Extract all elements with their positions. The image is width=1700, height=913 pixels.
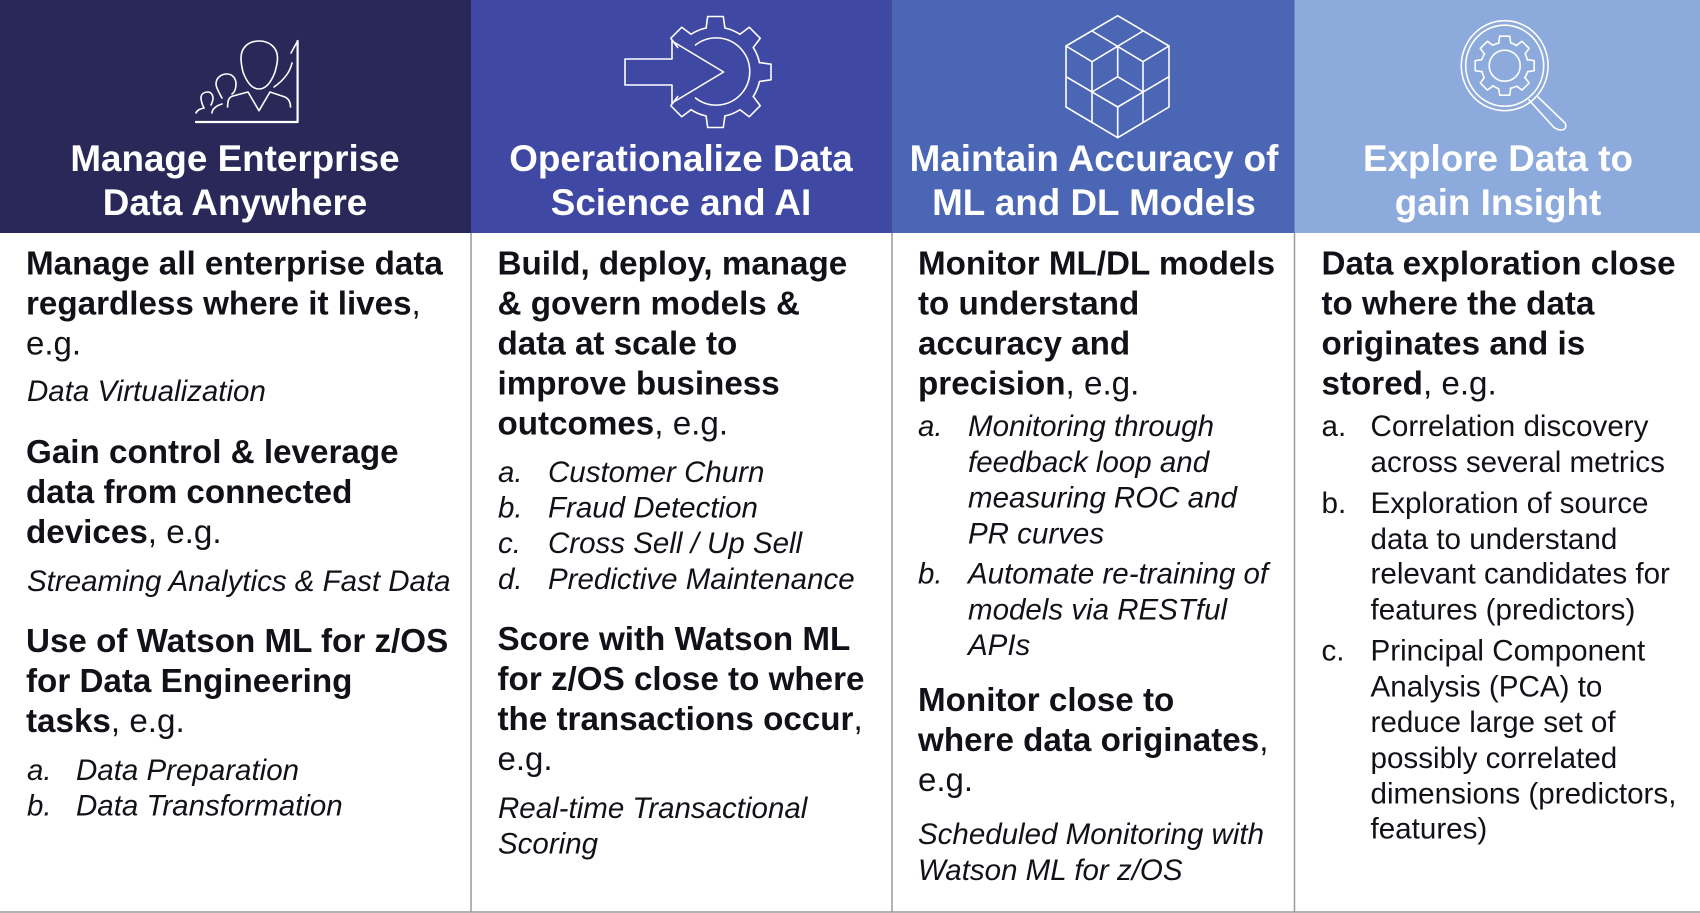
header band 2 xyxy=(471,0,892,233)
text block: manage enterprise body: b. xyxy=(27,790,52,822)
text block: maintain accuracy body: Automate re-training of xyxy=(966,558,1271,590)
text block: maintain accuracy body: precision, e.g. xyxy=(918,366,1139,402)
text block: operationalize body: Real-time Transactional xyxy=(498,792,809,825)
text block: explore body: Data exploration close xyxy=(1322,246,1676,282)
header band 4 xyxy=(1294,0,1700,233)
text block: maintain accuracy body: Scheduled Monitoring with xyxy=(918,818,1264,851)
text block: maintain accuracy body: e.g. xyxy=(918,761,973,798)
text block: maintain accuracy body xyxy=(917,246,1275,887)
text block: maintain accuracy body: b. xyxy=(918,558,943,590)
heading 2: Science and AI xyxy=(551,182,811,223)
text block: explore body: to where the data xyxy=(1322,286,1595,322)
text block: manage enterprise body: a. xyxy=(27,754,52,787)
heading 4: gain Insight xyxy=(1395,182,1601,223)
text block: manage enterprise body: Use of Watson ML for z/OS xyxy=(26,623,448,660)
text block: maintain accuracy body: models via RESTful xyxy=(968,594,1228,626)
text block: manage enterprise body: Data Transformation xyxy=(76,790,343,822)
text block: manage enterprise body: devices, e.g. xyxy=(26,514,222,551)
text block: operationalize body: Fraud Detection xyxy=(548,492,758,524)
heading 2: Operationalize Data xyxy=(509,138,853,179)
text block: operationalize body: Build, deploy, manage xyxy=(498,246,847,282)
text block: operationalize body: a. xyxy=(498,456,523,489)
text block: explore body: a. xyxy=(1322,410,1346,443)
text block: manage enterprise body: e.g. xyxy=(26,324,81,362)
header band 3 xyxy=(892,0,1294,233)
text block: explore body: reduce large set of xyxy=(1370,706,1616,739)
text block: manage enterprise body: for Data Engineering xyxy=(26,663,352,700)
text block: operationalize body: b. xyxy=(498,492,523,524)
text block: operationalize body: the transactions occur, xyxy=(498,701,863,738)
text block: manage enterprise body: Data Virtualization xyxy=(27,375,266,408)
text block: maintain accuracy body: Monitoring through xyxy=(968,410,1214,443)
text block: explore body: Exploration of source xyxy=(1370,487,1649,520)
text block: operationalize body: Scoring xyxy=(498,828,599,860)
text block: operationalize body xyxy=(498,246,864,860)
text block: manage enterprise body: Manage all enterprise data xyxy=(26,246,443,282)
text block: manage enterprise body: Data Preparation xyxy=(76,754,299,787)
text block: operationalize body: Predictive Maintenance xyxy=(548,563,855,596)
panel: operationalize data science xyxy=(471,0,892,860)
text block: maintain accuracy body: feedback loop and xyxy=(968,446,1211,479)
text block: explore body: c. xyxy=(1322,634,1345,668)
text block: maintain accuracy body: Watson ML for z/OS xyxy=(918,854,1183,887)
text block: operationalize body: Score with Watson ML xyxy=(498,621,850,658)
heading 4: Explore Data to xyxy=(1363,138,1633,179)
icon: magnifier with gear xyxy=(1461,21,1566,130)
text block: operationalize body: Customer Churn xyxy=(548,456,764,489)
text block: operationalize body: data at scale to xyxy=(498,326,737,362)
text block: explore body: across several metrics xyxy=(1370,446,1665,479)
text block: explore body: possibly correlated xyxy=(1370,742,1617,775)
text block: explore body: features (predictors) xyxy=(1370,594,1635,626)
text block: maintain accuracy body: to understand xyxy=(918,286,1139,322)
icon: arrow into gear xyxy=(625,15,772,129)
text block: manage enterprise body: tasks, e.g. xyxy=(26,703,185,740)
text block: operationalize body: Cross Sell / Up Sell xyxy=(548,527,804,560)
text block: explore body: dimensions (predictors, xyxy=(1370,778,1676,810)
text block: maintain accuracy body: Monitor ML/DL models xyxy=(918,246,1275,282)
header band 1 xyxy=(0,0,471,233)
text block: explore body: Correlation discovery xyxy=(1370,410,1649,443)
text block: maintain accuracy body: where data originates, xyxy=(917,722,1268,759)
heading 1: Manage Enterprise xyxy=(70,138,400,179)
text block: explore body: Principal Component xyxy=(1370,634,1645,668)
text block: explore body: relevant candidates for xyxy=(1370,558,1670,590)
text block: explore body xyxy=(1322,246,1676,846)
panel: explore data xyxy=(1294,0,1700,846)
text block: explore body: Analysis (PCA) to xyxy=(1370,670,1602,704)
panel: manage enterprise data xyxy=(0,0,471,822)
text block: maintain accuracy body: APIs xyxy=(966,629,1031,662)
text block: operationalize body: for z/OS close to where xyxy=(498,661,864,698)
text block: maintain accuracy body: accuracy and xyxy=(918,326,1130,362)
text block: operationalize body: d. xyxy=(498,563,523,596)
text block: operationalize body: improve business xyxy=(498,366,780,402)
icon: people with growth chart xyxy=(196,41,298,122)
text block: operationalize body: c. xyxy=(498,527,521,560)
text block: maintain accuracy body: PR curves xyxy=(968,518,1104,550)
text block: manage enterprise body: Streaming Analytics & Fast Data xyxy=(27,565,451,598)
text block: manage enterprise body: Gain control & leverage xyxy=(26,434,399,471)
text block: explore body: originates and is xyxy=(1322,326,1585,362)
panel: maintain accuracy xyxy=(892,0,1294,887)
heading 3: ML and DL Models xyxy=(932,182,1256,223)
text block: maintain accuracy body: a. xyxy=(918,410,943,443)
text block: operationalize body: & govern models & xyxy=(498,286,800,322)
text block: explore body: stored, e.g. xyxy=(1322,366,1497,402)
icon: stacked cubes xyxy=(1066,16,1169,138)
text block: manage enterprise body: regardless where it lives, xyxy=(26,286,421,322)
text block: maintain accuracy body: Monitor close to xyxy=(918,682,1174,719)
heading 3: Maintain Accuracy of xyxy=(910,138,1279,179)
text block: manage enterprise body: data from connected xyxy=(26,474,352,511)
text block: operationalize body: outcomes, e.g. xyxy=(498,406,728,442)
heading 1: Data Anywhere xyxy=(103,182,367,223)
text block: manage enterprise body xyxy=(26,246,451,822)
text block: operationalize body: e.g. xyxy=(498,740,553,777)
text block: maintain accuracy body: measuring ROC and xyxy=(968,482,1238,514)
text block: explore body: data to understand xyxy=(1370,523,1617,556)
text block: explore body: features) xyxy=(1370,812,1487,846)
text block: explore body: b. xyxy=(1322,487,1346,520)
